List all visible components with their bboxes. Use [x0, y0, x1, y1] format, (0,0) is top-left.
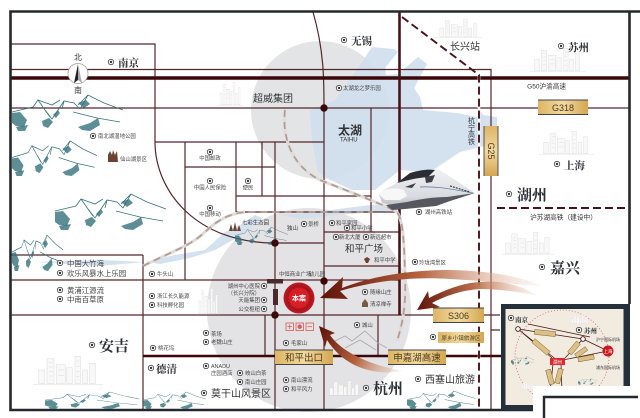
inset regional map: 浦东国际机场	[596, 364, 620, 370]
city labels: 德清	[156, 362, 177, 376]
gold label: 原乡小镇旅游区	[438, 332, 484, 343]
high speed rail dashed: Hangning	[402, 17, 629, 410]
landmark labels: 莫干山风景区	[211, 388, 271, 400]
gold label: 和平出口	[275, 350, 333, 364]
road nodes	[271, 104, 328, 319]
compass: 南	[74, 85, 82, 95]
inset nodes	[516, 327, 520, 331]
central POI labels: 和平家园	[336, 219, 358, 227]
central POI labels: 湖州中心医院	[228, 282, 261, 290]
central POI labels: 中国人民保险	[194, 184, 227, 192]
central POI labels: 玲珑湾景区	[419, 258, 447, 266]
central POI labels: 科技孵化园	[157, 301, 184, 309]
central POI labels: 岐山白茶	[245, 369, 267, 377]
gold label: G25: G25	[486, 142, 496, 160]
landmark labels: 和平广场	[345, 243, 383, 255]
red facility icons	[286, 323, 314, 330]
bottom-right cutout	[533, 386, 640, 418]
left side POI labels: 南北湖湿地公园	[98, 132, 136, 140]
central POI labels: 桃花坞	[158, 344, 174, 352]
landmark labels: 西塞山旅游	[425, 373, 475, 386]
central POI labels: （长兴分院）	[228, 289, 260, 297]
left side POI labels: 欢乐风暴水上乐园	[67, 269, 126, 278]
inset regional map: 苏州	[584, 326, 598, 335]
central POI labels: 湖州高铁站	[425, 208, 453, 216]
central POI labels	[149, 84, 453, 393]
city labels: 无锡	[351, 34, 372, 48]
train	[379, 169, 475, 210]
central POI labels: 七彩生态园	[242, 218, 269, 226]
left side POI labels: 黄浦江源流	[67, 286, 105, 295]
central POI labels: 茶场	[211, 330, 222, 338]
inset dotted ring	[515, 310, 609, 404]
gold label: 申嘉湖高速: 申嘉湖高速	[393, 352, 441, 364]
central POI labels: 和平风力	[291, 385, 313, 393]
city labels: 南京	[118, 56, 139, 70]
project marker: 本案	[292, 294, 306, 302]
mountains	[12, 95, 476, 409]
arrow: from Jiaxing	[320, 270, 542, 299]
landmark labels: 长兴站	[450, 40, 480, 53]
gold label: G318	[538, 100, 588, 114]
central POI labels: 新北大厦	[339, 233, 361, 241]
city labels: 苏州	[568, 41, 589, 54]
outline hills near Chengshan	[333, 331, 387, 350]
gold label: 申嘉湖高速	[388, 350, 446, 364]
landmark labels: 太湖	[338, 122, 362, 138]
building skylines	[33, 19, 594, 396]
gold label: G25	[484, 126, 498, 176]
central POI labels: 新远超市	[370, 233, 392, 241]
central POI labels: 独山	[287, 224, 298, 232]
inset regional map: 南京	[515, 315, 528, 324]
inset gold tags	[532, 329, 594, 385]
central POI labels: 随缘山庄	[370, 288, 392, 296]
gold label: 原乡小镇旅游区: 原乡小镇旅游区	[441, 334, 481, 342]
left side POI labels: 仙山湖景区	[120, 155, 148, 163]
central POI labels: 毛家山	[291, 339, 307, 347]
central POI labels: 中国移动	[199, 210, 221, 218]
inset routes	[518, 324, 608, 392]
central POI labels: 牛头山	[157, 270, 173, 278]
central POI labels: 城山	[362, 321, 373, 329]
central POI labels: 公交枢纽	[238, 305, 261, 313]
central POI labels: 中国邮政	[199, 154, 221, 162]
gold label: 和平出口: 和平出口	[285, 352, 323, 364]
lake: Taihu water	[35, 47, 497, 266]
central POI labels: ANADU	[211, 364, 230, 370]
landmark labels: 超威集团	[253, 92, 293, 105]
central POI labels: 庄园酒店	[211, 369, 233, 377]
small road tags	[267, 279, 283, 305]
gold label: S306: S306	[448, 311, 469, 321]
inset second skyline	[521, 381, 535, 390]
inset regional map: 沪宁国际机场	[596, 336, 620, 342]
landmark labels: 沪苏湖高铁（建设中）	[530, 212, 597, 222]
compass: 北	[74, 53, 82, 62]
compass	[68, 53, 88, 95]
central POI labels: 便民	[243, 184, 253, 192]
landmark labels: 杭宁高铁	[468, 116, 475, 146]
central POI labels: 和平中学	[374, 256, 396, 264]
central POI labels: 南山漂流	[291, 376, 313, 384]
central POI labels: 景桥	[308, 220, 319, 228]
city labels: 安吉	[99, 337, 129, 355]
inset mountains	[511, 356, 534, 365]
central POI labels: 和平小学	[351, 224, 373, 232]
city labels	[89, 34, 589, 398]
central POI labels: 太湖龙之梦乐园	[343, 84, 381, 92]
grey catchment circles	[207, 41, 411, 412]
rail lines: curved pale dashed	[143, 110, 405, 341]
landmark labels	[201, 40, 597, 400]
inset mountains east	[578, 378, 597, 385]
arrow: from Hangzhou	[319, 326, 403, 372]
left side POI labels: 中国大竹海	[67, 259, 105, 268]
central POI labels: 幼儿园	[309, 270, 325, 278]
inset labels	[508, 315, 514, 321]
inset regional map	[501, 304, 630, 410]
central POI labels: 南山庄园	[245, 378, 267, 386]
inset skylines	[570, 314, 590, 324]
gold label: S306	[433, 308, 484, 322]
city labels: 嘉兴	[550, 259, 581, 277]
city labels: 湖州	[517, 186, 547, 204]
left side POI labels	[57, 132, 148, 304]
central POI labels: 浙江长久能源	[157, 292, 190, 300]
landmark labels: TAIHU	[340, 138, 358, 144]
inset regional map: 湖州	[553, 358, 562, 366]
central POI labels: 天能集团	[238, 296, 260, 304]
arrow: from Huzhou east	[417, 282, 538, 310]
city labels: 杭州	[373, 380, 403, 398]
gold label: G318: G318	[552, 103, 574, 113]
central POI labels: 老魏山庄	[211, 338, 233, 346]
central POI labels: 中恒商业广场	[279, 270, 312, 278]
inset regional map: 上海	[604, 348, 613, 355]
left side POI labels: 中南百草原	[67, 295, 104, 304]
central POI labels: 清凉禅寺	[370, 300, 392, 308]
city labels: 上海	[564, 159, 585, 172]
landmark labels: G50沪渝高速	[527, 82, 566, 90]
project marker	[284, 282, 314, 314]
